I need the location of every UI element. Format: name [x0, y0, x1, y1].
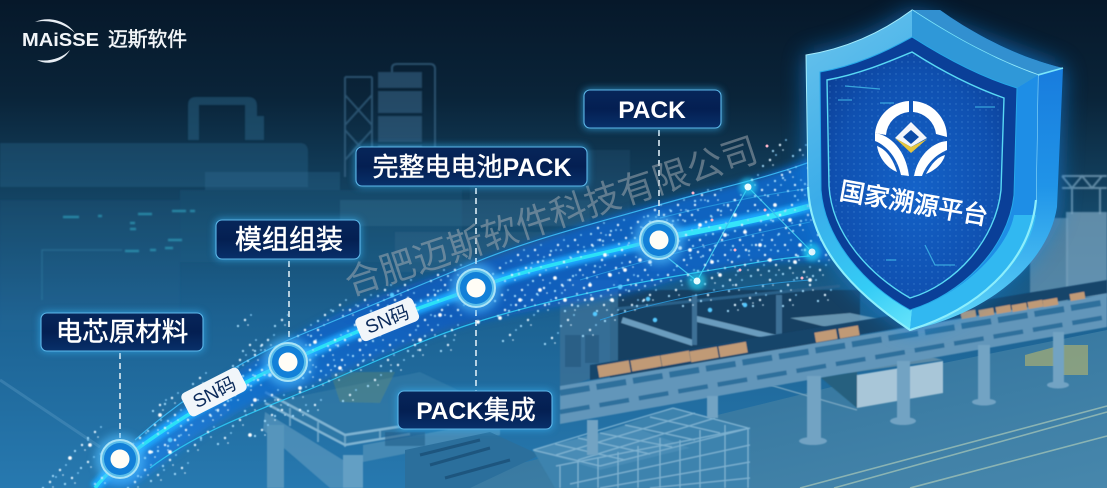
platform emblem — [875, 101, 947, 176]
logo: MAISSE 迈斯软件 — [22, 19, 187, 63]
particle cloud copies — [43, 140, 832, 488]
label: 模组组装 — [215, 219, 361, 260]
node: PACK — [634, 215, 684, 265]
right truss — [1062, 176, 1107, 214]
cyan indicator dashes — [63, 211, 195, 251]
mid building — [340, 150, 630, 272]
left diagonal rail — [0, 380, 100, 447]
rim lower right highlight — [910, 215, 1036, 330]
node: 完整电电池PACK — [451, 263, 501, 313]
label: 完整电电池PACK: 完整电电池PACK — [372, 152, 572, 182]
yellow pallet — [1025, 345, 1088, 375]
rim right part — [910, 75, 1038, 330]
label: 完整电电池PACK — [355, 146, 588, 187]
main cyan line right — [659, 200, 830, 239]
shield front rim — [806, 10, 1038, 330]
dark stack — [405, 432, 540, 488]
blue glow particles — [170, 287, 745, 440]
shield — [806, 10, 1063, 330]
tower scaffold — [345, 64, 435, 179]
main cyan line glow — [95, 200, 830, 488]
SN tag 2: SN码 — [363, 302, 413, 339]
node: 电芯原材料 — [95, 434, 145, 484]
lower left outline — [42, 250, 122, 300]
rim bottom highlight — [808, 187, 1036, 330]
dashed connectors — [120, 130, 659, 438]
white machine box — [770, 355, 943, 410]
shield face — [827, 52, 1004, 298]
SN tag 2 — [354, 296, 421, 343]
label: 电芯原材料 — [40, 312, 204, 352]
logo: MAISSE 迈斯软件: 迈斯软件 — [108, 29, 187, 51]
logo: MAISSE 迈斯软件: MAiSSE — [22, 30, 99, 50]
SN tag 1: SN码 — [190, 374, 240, 413]
pink particles — [693, 146, 802, 278]
SN tag 1 — [180, 366, 248, 418]
main cyan line — [95, 239, 659, 488]
watermark: 合肥迈斯软件科技有限公司 — [340, 129, 763, 304]
conveyor legs — [587, 332, 1069, 455]
stream glow band — [95, 150, 830, 488]
bright network nodes — [688, 178, 821, 290]
network lines — [668, 187, 812, 281]
back conveyor and dark zone — [560, 280, 885, 390]
bright particles — [70, 205, 810, 458]
right tanks — [1030, 212, 1107, 308]
floor lane lines — [800, 406, 1107, 488]
shield glow — [806, 10, 1063, 330]
shield top bevel — [912, 10, 1063, 75]
label: PACK: PACK — [618, 97, 686, 124]
factory floor — [420, 330, 1107, 488]
thin edge lines — [135, 162, 810, 440]
circuit traces — [838, 86, 995, 265]
label: PACK集成: PACK集成 — [416, 395, 536, 425]
rim top right part — [912, 10, 1038, 88]
factory silhouette background — [0, 64, 1107, 330]
label: PACK集成 — [397, 390, 553, 430]
label: PACK — [583, 89, 722, 129]
node: 模组组装 — [263, 337, 313, 387]
label: 模组组装: 模组组装 — [235, 225, 343, 255]
front conveyor line — [560, 280, 1107, 455]
cargo boxes — [597, 292, 1085, 378]
label: 电芯原材料: 电芯原材料 — [56, 317, 188, 347]
data stream — [43, 140, 832, 488]
platform name: 国家溯源平台 — [838, 177, 990, 231]
shield inner dark panel — [820, 37, 1017, 310]
left building body — [0, 97, 462, 330]
battery crate stacks — [533, 408, 750, 488]
shield side wall — [910, 10, 1063, 330]
platform structure — [263, 372, 500, 488]
tower drums — [378, 72, 422, 165]
shield dot pattern — [827, 52, 1004, 298]
